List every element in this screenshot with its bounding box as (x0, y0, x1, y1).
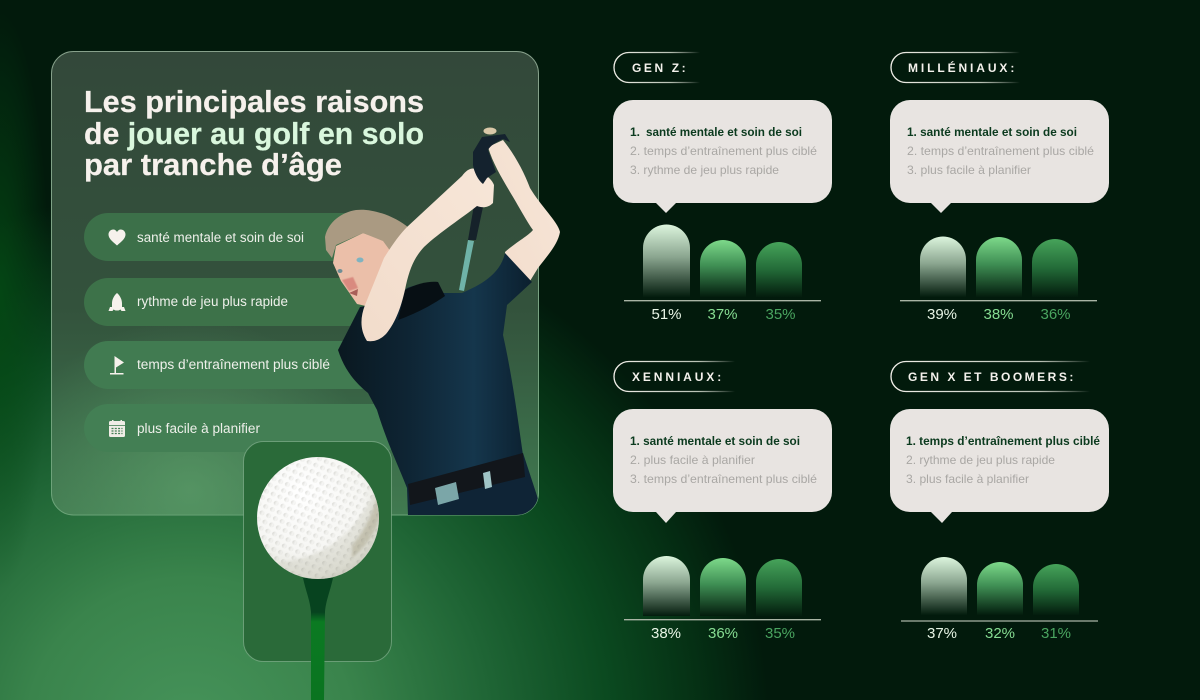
bar chart: 35% (765, 625, 795, 642)
golf club (459, 205, 483, 291)
reason: santé mentale (84, 213, 384, 261)
head (325, 210, 409, 306)
reason: temps d'entraînement (84, 341, 384, 389)
bar chart (624, 224, 821, 323)
shirt (338, 253, 532, 488)
ball card (244, 442, 392, 700)
speech bubble: 1. (630, 125, 640, 139)
label: Gen Z (614, 52, 700, 83)
bar chart: 36% (1040, 306, 1071, 323)
speech bubble: santé mentale et soin de soi (646, 125, 802, 139)
icon: golf ball (257, 457, 385, 585)
bar chart: 39% (927, 306, 957, 323)
panel: main glass card (51, 52, 541, 516)
panel: reasons list (84, 213, 404, 452)
speech bubble: 2. temps d’entraînement plus ciblé (630, 144, 817, 158)
golfer photo (325, 128, 560, 516)
bar chart: 38% (983, 306, 1014, 323)
section: Gen Z (613, 52, 832, 323)
label: Gen Z: GEN Z: (632, 61, 688, 75)
icon: rocket (108, 293, 126, 311)
speech bubble: 2. plus facile à planifier (630, 453, 755, 467)
section: Milléniaux (890, 52, 1109, 323)
reason: plus facile (84, 404, 404, 452)
icon: flag (110, 356, 124, 374)
reason: rythme de jeu: rythme de jeu plus rapide (137, 294, 288, 309)
hair (325, 210, 409, 262)
speech bubble: 1. santé mentale et soin de soi (630, 434, 800, 448)
bar chart: 37% (707, 306, 738, 323)
icon: calendar (109, 420, 125, 437)
bar chart: 32% (985, 625, 1015, 642)
bar chart: 31% (1041, 625, 1071, 642)
belt and pants (407, 453, 540, 516)
label: Milléniaux: MILLÉNIAUX: (908, 60, 1017, 75)
speech bubble: 2. temps d’entraînement plus ciblé (907, 144, 1094, 158)
icon: heart (108, 230, 126, 246)
bar chart (901, 557, 1098, 642)
speech bubble: 2. rythme de jeu plus rapide (906, 453, 1055, 467)
bar chart: 36% (708, 625, 738, 642)
bar chart: 38% (651, 625, 681, 642)
bar chart: 51% (651, 306, 682, 323)
label: Xenniaux: XENNIAUX: (632, 370, 724, 384)
label: Milléniaux (891, 52, 1020, 83)
section: Gen X et Boomers (890, 362, 1109, 642)
title: de jouer au golf en solo (84, 116, 424, 151)
label: Gen X et Boomers (891, 362, 1090, 392)
reason: rythme de jeu (84, 278, 384, 326)
front arm and hand (361, 169, 494, 341)
speech bubble (613, 100, 832, 213)
collar (398, 282, 445, 320)
bar chart: 35% (765, 306, 796, 323)
reason: plus facile: plus facile à planifier (137, 421, 260, 436)
title: Les principales raisons (84, 84, 424, 119)
back arm (488, 140, 560, 298)
bar chart: 37% (927, 625, 957, 642)
speech bubble (613, 409, 832, 523)
title: par tranche d’âge (84, 147, 342, 182)
icon: golf tee (303, 578, 333, 700)
club grip end (484, 128, 496, 134)
label: Gen X et Boomers: GEN X ET BOOMERS: (908, 370, 1076, 384)
speech bubble: 3. rythme de jeu plus rapide (630, 163, 779, 177)
speech bubble: 3. plus facile à planifier (907, 163, 1031, 177)
speech bubble: 1. santé mentale et soin de soi (907, 125, 1077, 139)
speech bubble (890, 409, 1109, 523)
bar chart (624, 556, 821, 642)
glove (473, 134, 510, 184)
reason: santé mentale: santé mentale et soin de soi (137, 230, 304, 245)
title (84, 84, 424, 182)
reason: temps d'entraînement: temps d’entraînement plus ciblé (137, 357, 330, 372)
speech bubble: 3. plus facile à planifier (906, 472, 1029, 486)
speech bubble: 1. temps d’entraînement plus ciblé (906, 434, 1100, 448)
bar chart (900, 236, 1097, 323)
section: Xenniaux (613, 362, 832, 642)
label: Xenniaux (614, 362, 735, 392)
speech bubble (890, 100, 1109, 213)
speech bubble: 3. temps d’entraînement plus ciblé (630, 472, 817, 486)
